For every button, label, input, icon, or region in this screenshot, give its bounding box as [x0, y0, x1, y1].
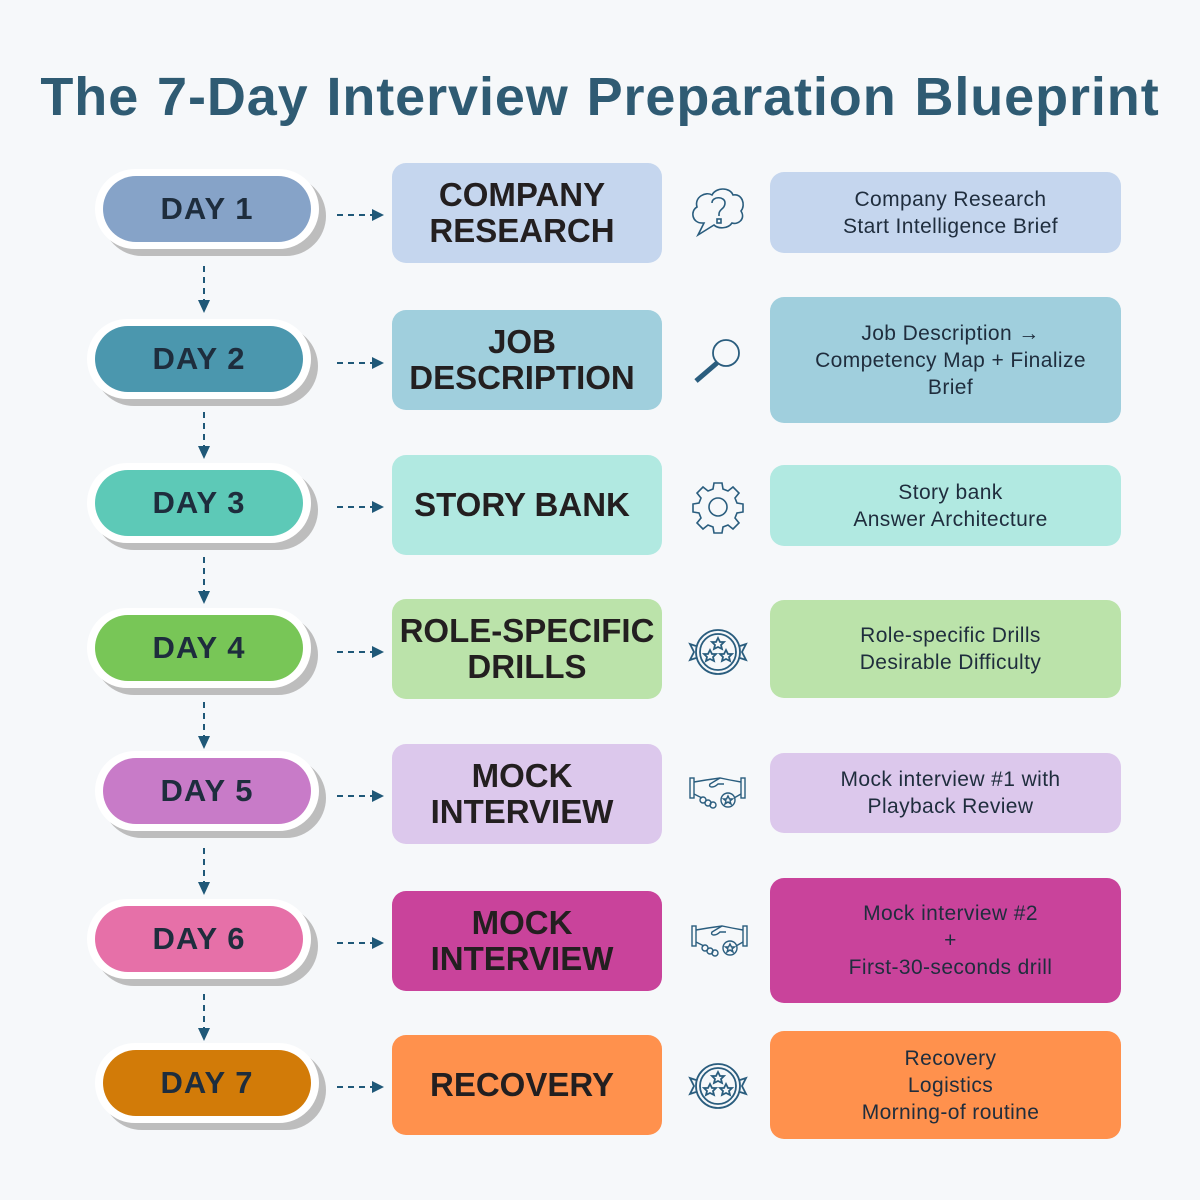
desc: day 4: Role-specific Drills [860, 624, 1041, 647]
day 4 pill [87, 608, 311, 688]
desc: day 7: Morning-of routine [862, 1100, 1039, 1124]
box: recovery: RECOVERY [430, 1066, 614, 1103]
desc: day 7: Logistics [908, 1074, 993, 1096]
icon: question cloud [692, 188, 744, 237]
desc: day 6 [770, 878, 1121, 1003]
desc: day 6: Mock interview #2 [863, 902, 1038, 925]
day 5 pill [95, 751, 319, 831]
desc: day 1 [770, 172, 1121, 253]
desc: day 7: Recovery [905, 1046, 996, 1070]
box: company research: COMPANY [439, 176, 605, 213]
box: story bank [392, 455, 662, 555]
day 1 pill [95, 169, 319, 249]
icon: magnifier [694, 339, 740, 383]
box: mock interview 2 [392, 891, 662, 991]
box: mock interview 2: INTERVIEW [431, 940, 613, 977]
box: mock interview 1: INTERVIEW [431, 793, 613, 830]
day 6 pill: DAY 6 [153, 921, 245, 956]
desc: day 2 [770, 297, 1121, 423]
box: story bank: STORY BANK [414, 486, 630, 523]
desc: day 6: First-30-seconds drill [849, 956, 1052, 979]
day 6 pill [87, 899, 311, 979]
desc: day 5: Playback Review [868, 795, 1033, 818]
day 3 pill [87, 463, 311, 543]
box: mock interview 1: MOCK [472, 757, 572, 794]
box: role-specific drills: DRILLS [467, 648, 587, 685]
icon: badge stars 2 [688, 1063, 748, 1109]
desc: day 3: Story bank [898, 480, 1003, 504]
desc: day 4 [770, 600, 1121, 698]
desc: day 5: Mock interview #1 with [840, 768, 1061, 791]
day 2 pill [87, 319, 311, 399]
box: company research: RESEARCH [429, 212, 615, 249]
day 1 pill: DAY 1 [161, 191, 253, 226]
box: job description [392, 310, 662, 410]
box: mock interview 2: MOCK [472, 904, 572, 941]
icon: handshake 1 [689, 777, 746, 809]
box: role-specific drills [392, 599, 662, 699]
desc: day 1: Company Research [854, 188, 1046, 210]
desc: day 4: Desirable Difficulty [860, 651, 1041, 674]
title: The 7-Day Interview Preparation Blueprint [40, 67, 1160, 127]
desc: day 5 [770, 753, 1121, 833]
desc: day 6: + [944, 929, 957, 952]
box: role-specific drills: ROLE-SPECIFIC [400, 612, 654, 649]
box: job description: JOB [488, 323, 556, 360]
box: company research [392, 163, 662, 263]
desc: day 3: Answer Architecture [853, 508, 1048, 530]
desc: day 2: Brief [928, 376, 973, 398]
desc: day 7 [770, 1031, 1121, 1139]
desc: day 3 [770, 465, 1121, 546]
day 2 pill: DAY 2 [153, 341, 245, 376]
box: recovery [392, 1035, 662, 1135]
desc: day 2: Competency Map + Finalize [815, 348, 1086, 372]
box: mock interview 1 [392, 744, 662, 844]
day 4 pill: DAY 4 [153, 630, 245, 665]
icon: gear [692, 482, 744, 534]
day 7 pill: DAY 7 [161, 1065, 253, 1100]
day 3 pill: DAY 3 [153, 485, 245, 520]
day 7 pill [95, 1043, 319, 1123]
icon: handshake 2 [691, 925, 748, 957]
day 5 pill: DAY 5 [161, 773, 253, 808]
box: job description: DESCRIPTION [409, 359, 635, 396]
desc: day 1: Start Intelligence Brief [843, 214, 1058, 238]
desc: day 2: Job Description → [861, 322, 1040, 344]
icon: badge stars [688, 629, 748, 675]
